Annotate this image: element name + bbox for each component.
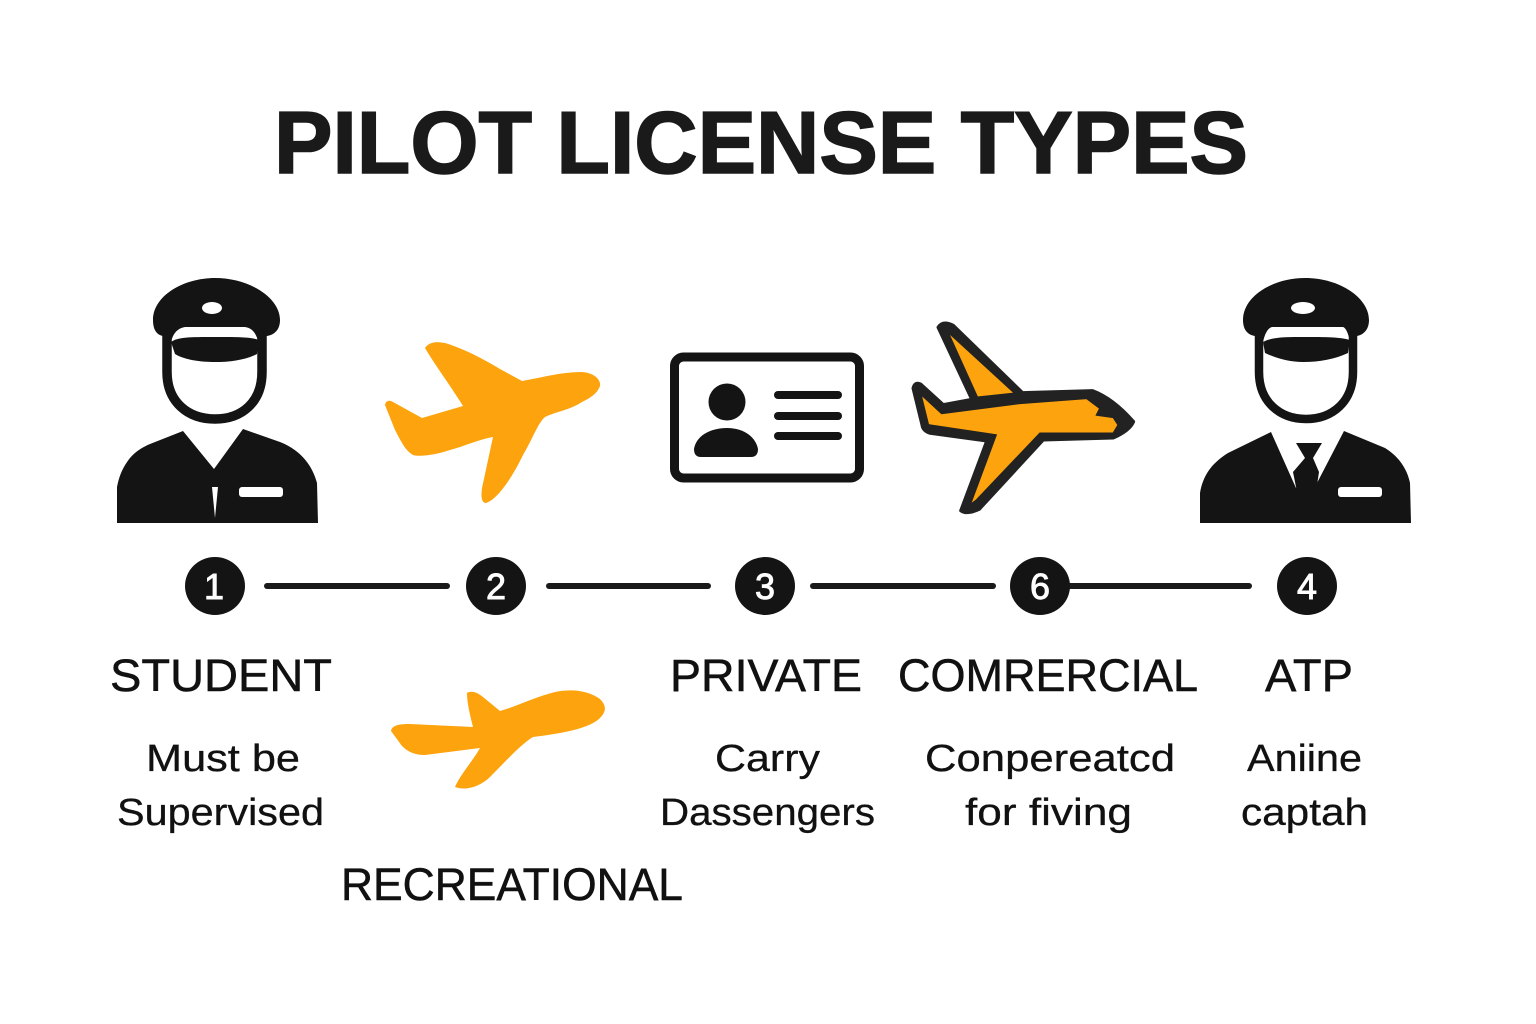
description: ATP: Aniine xyxy=(1247,738,1362,780)
description: private xyxy=(660,738,875,834)
label: private: PRIVATE xyxy=(670,650,862,701)
description: student xyxy=(117,738,324,834)
description: commercial: Conpereatcd xyxy=(925,738,1175,780)
icon: outlined commercial plane xyxy=(913,323,1134,513)
step 2: 2 xyxy=(486,566,506,607)
icon: license card xyxy=(674,357,860,478)
description: commercial: for fiving xyxy=(965,792,1132,834)
step 1: 1 xyxy=(204,566,224,607)
step 4: 4 xyxy=(1297,566,1317,607)
icon: orange plane, recreational top xyxy=(385,342,600,503)
description: private: Dassengers xyxy=(660,792,875,834)
description: ATP: captah xyxy=(1241,792,1368,834)
step 3: 3 xyxy=(755,566,775,607)
step 2 xyxy=(466,557,526,615)
label: student: STUDENT xyxy=(110,650,332,701)
icon: orange plane, lower xyxy=(391,690,605,789)
timeline xyxy=(185,557,1337,615)
label: recreational: RECREATIONAL xyxy=(341,859,683,910)
connector lines xyxy=(267,583,1249,589)
step 4 xyxy=(1277,557,1337,615)
label: ATP: ATP xyxy=(1265,650,1353,701)
step 1 xyxy=(185,557,245,615)
description: private: Carry xyxy=(715,738,820,780)
icon: ATP captain xyxy=(1200,278,1411,523)
step 6 xyxy=(1010,557,1070,615)
description: commercial xyxy=(925,738,1175,834)
label: commercial: COMRERCIAL xyxy=(898,650,1198,701)
title: PILOT LICENSE TYPES xyxy=(274,93,1248,192)
icon: student pilot xyxy=(117,278,318,523)
step 3 xyxy=(735,557,795,615)
description: student: Supervised xyxy=(117,792,324,834)
description: student: Must be xyxy=(146,738,300,780)
description: ATP xyxy=(1241,738,1368,834)
step 6: 6 xyxy=(1030,566,1050,607)
